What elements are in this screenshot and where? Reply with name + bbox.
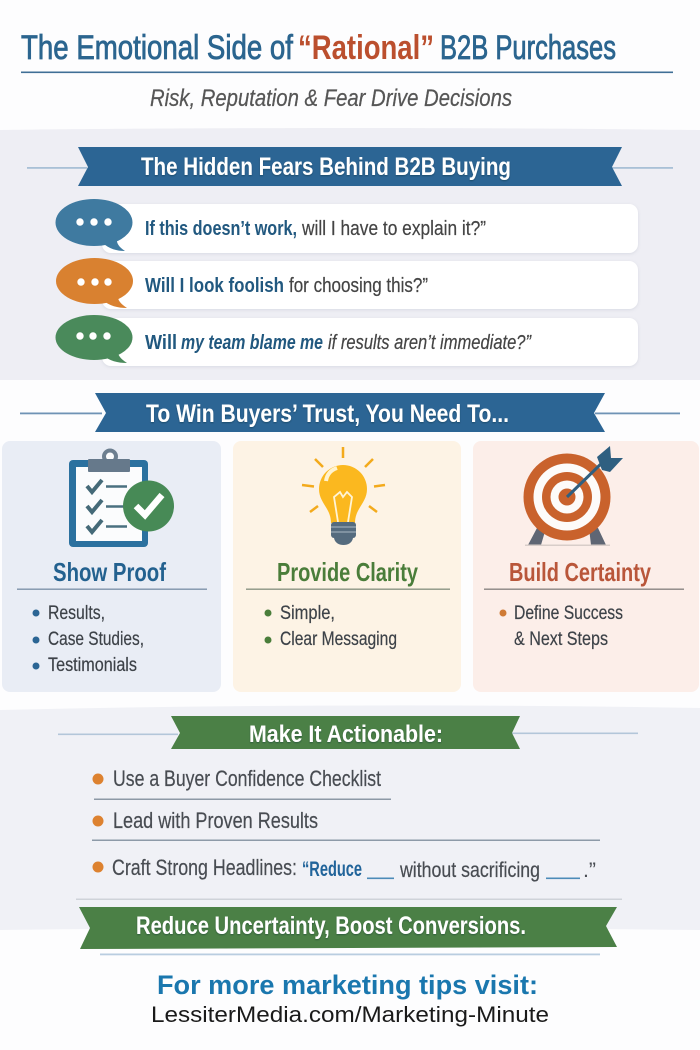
action item 1: Use a Buyer Confidence Checklist: [113, 766, 381, 791]
fear card 2: Will I look foolish: [145, 275, 284, 297]
list: certainty items: Define Success: [514, 603, 623, 624]
list: clarity items: [264, 603, 397, 650]
panel: provide clarity: [233, 441, 461, 692]
action item 3: Craft Strong Headlines:: [112, 855, 297, 880]
footer call to action: [151, 970, 549, 1027]
heading: provide clarity: Provide Clarity: [277, 557, 418, 587]
banner: win trust: [20, 393, 680, 432]
fear card 2: [102, 261, 638, 309]
list: certainty items: & Next Steps: [514, 629, 608, 650]
fear card 3: my team blame me: [181, 332, 323, 354]
banner: reduce uncertainty: [79, 907, 617, 949]
fear card 1: [102, 204, 638, 253]
heading: show proof: Show Proof: [53, 557, 166, 587]
fear card 3: if results aren’t immediate?”: [328, 332, 532, 354]
banner: hidden fears: [78, 147, 622, 186]
panel: build certainty: [473, 441, 699, 692]
title: B2B Purchases: [440, 29, 616, 67]
fear card 3: [102, 318, 638, 366]
icon: blue speech bubble: [56, 199, 132, 251]
banner: hidden fears: The Hidden Fears Behind B2B Buying: [141, 153, 511, 181]
panel: make it actionable: [0, 705, 700, 930]
banner: win trust: To Win Buyers’ Trust, You Need To...: [146, 400, 509, 428]
title: The Emotional Side of: [21, 29, 293, 67]
list: proof items: Case Studies,: [48, 629, 144, 650]
panel: hidden fears: [0, 128, 700, 380]
panel: show proof: [2, 441, 221, 692]
title: “Rational”: [298, 29, 434, 67]
title: [21, 29, 616, 67]
list: clarity items: Simple,: [280, 603, 335, 624]
footer call to action: LessiterMedia.com/Marketing-Minute: [151, 1002, 549, 1027]
action item 3: [92, 855, 596, 882]
icon: clipboard with check: [69, 450, 174, 547]
fear card 3: Will: [145, 332, 177, 354]
fear card 1: If this doesn’t work,: [145, 218, 297, 240]
banner: make it actionable: Make It Actionable:: [249, 721, 443, 748]
list: proof items: Results,: [48, 603, 105, 624]
banner: reduce uncertainty: Reduce Uncertainty, Boost Conversions.: [136, 912, 526, 940]
list: certainty items: [500, 603, 623, 650]
fear card 1: will I have to explain it?”: [301, 218, 486, 240]
action item 2: Lead with Proven Results: [113, 808, 318, 833]
action item 3: without sacrificing: [399, 859, 540, 882]
fear card 2: for choosing this?”: [289, 275, 428, 297]
banner: make it actionable: [171, 716, 520, 749]
action item 3: “Reduce: [302, 858, 362, 881]
subtitle: Risk, Reputation & Fear Drive Decisions: [150, 85, 512, 112]
list: proof items: Testimonials: [48, 655, 137, 676]
icon: orange speech bubble: [56, 258, 133, 308]
icon: light bulb: [302, 447, 385, 545]
icon: target with arrow: [524, 446, 623, 546]
heading: build certainty: Build Certainty: [509, 557, 651, 587]
action item 3: .”: [583, 859, 596, 882]
footer call to action: For more marketing tips visit:: [157, 970, 538, 1000]
list: clarity items: Clear Messaging: [280, 629, 397, 650]
icon: green speech bubble: [56, 315, 132, 363]
list: proof items: [32, 603, 144, 676]
